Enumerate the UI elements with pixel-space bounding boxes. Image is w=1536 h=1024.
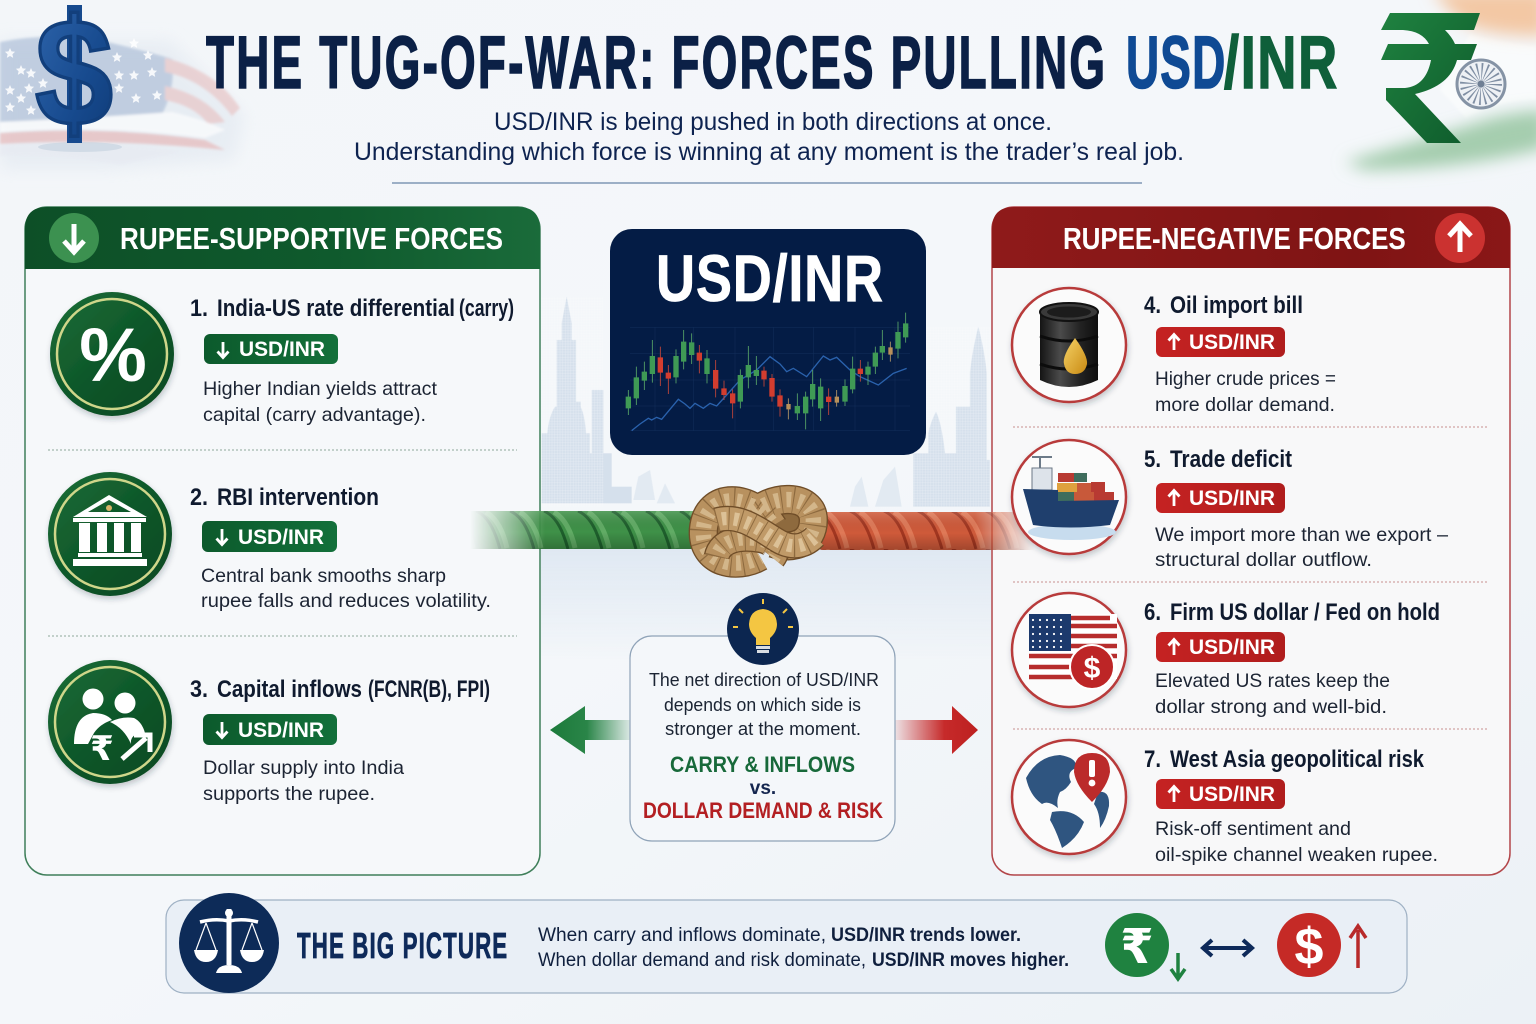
icon: globe with warning pin	[1012, 740, 1126, 854]
icon: dollar up: $	[1295, 918, 1324, 976]
icon: US flag with dollar coin	[1012, 593, 1126, 707]
force 1: rate differential: capital (carry advantage).	[203, 404, 426, 426]
icon: US flag with dollar coin: $	[1084, 652, 1101, 685]
force 1: rate differential: (carry)	[459, 295, 514, 322]
USD/INR chart card: USD/INR	[656, 241, 883, 315]
banner: the big picture	[166, 893, 1407, 993]
force 2: RBI intervention: Central bank smooths sharp	[201, 565, 446, 587]
force 4: oil import bill: more dollar demand.	[1155, 394, 1335, 416]
USD/INR chart card	[610, 229, 926, 455]
banner: the big picture: When dollar demand and risk dominate,	[538, 949, 866, 971]
icon: dollar up	[1277, 913, 1366, 977]
candlestick chart	[626, 313, 910, 431]
panel: rupee-supportive forces	[25, 207, 540, 875]
force 5: trade deficit: Trade deficit	[1170, 446, 1292, 473]
arrow: green left	[550, 706, 632, 754]
icon: percent: %	[79, 313, 147, 398]
force 4: oil import bill	[1012, 288, 1336, 416]
panel: rupee-negative forces	[992, 207, 1510, 875]
icon: rupee symbol	[1381, 13, 1480, 143]
skyline backdrop	[540, 297, 990, 507]
subtitle: USD/INR is being pushed in both directions at once.	[494, 108, 1052, 136]
force 1: rate differential: India-US rate differential	[217, 295, 455, 322]
badge: USD/INR up	[1156, 779, 1285, 809]
icon: balance scale	[179, 893, 279, 993]
force 3: capital inflows: Capital inflows	[217, 676, 362, 703]
force 5: trade deficit: We import more than we export –	[1155, 524, 1448, 546]
force 3: capital inflows: Dollar supply into India	[203, 757, 404, 779]
force 2: RBI intervention: rupee falls and reduces volatility.	[201, 590, 491, 612]
icon: rope knot	[690, 487, 825, 576]
callout: net direction: The net direction of USD/INR	[649, 669, 879, 690]
panel header: negative: RUPEE-NEGATIVE FORCES	[1063, 222, 1406, 257]
force 6: firm US dollar: 6.	[1144, 599, 1161, 626]
badge: USD/INR down	[202, 521, 337, 552]
icon: people and rupee	[48, 660, 172, 784]
badge: USD/INR up	[1156, 327, 1285, 357]
callout: net direction	[630, 636, 895, 841]
ship icon: trade deficit	[1012, 440, 1126, 554]
force 2: RBI intervention: 2.	[190, 484, 208, 511]
force 3: capital inflows: supports the rupee.	[203, 783, 375, 805]
icon: light bulb	[727, 593, 799, 665]
force 4: oil import bill: Higher crude prices =	[1155, 368, 1336, 390]
force 7: West Asia risk: oil-spike channel weaken rupee.	[1155, 844, 1438, 866]
banner: the big picture: THE BIG PICTURE	[297, 927, 507, 966]
icon: central bank	[48, 472, 172, 596]
callout: net direction: DOLLAR DEMAND & RISK	[643, 798, 883, 823]
badge: USD/INR down: USD/INR	[238, 719, 324, 742]
icon: rupee down: ₹	[1120, 919, 1154, 975]
badge: USD/INR down: USD/INR	[239, 338, 325, 361]
badge: USD/INR down	[203, 714, 337, 745]
icon: people and rupee: ₹	[90, 729, 114, 769]
callout: net direction: CARRY & INFLOWS	[670, 752, 855, 777]
banner: the big picture: When carry and inflows dominate,	[538, 924, 826, 946]
panel header: supportive	[25, 207, 540, 269]
force 7: West Asia risk: West Asia geopolitical risk	[1170, 746, 1425, 773]
rope: red side	[815, 512, 1045, 550]
badge: USD/INR up	[1156, 632, 1285, 662]
force 5: trade deficit	[1144, 446, 1448, 571]
icon: oil barrel	[1012, 288, 1126, 402]
title: /INR	[1224, 21, 1337, 104]
force 1: rate differential: Higher Indian yields attract	[203, 378, 438, 400]
callout: net direction: vs.	[750, 778, 776, 799]
arrow: red right	[894, 706, 978, 754]
force 7: West Asia risk: 7.	[1144, 746, 1161, 773]
force 5: trade deficit: 5.	[1144, 446, 1161, 473]
force 1: rate differential: 1.	[190, 295, 208, 322]
force 3: capital inflows	[48, 660, 490, 805]
force 2: RBI intervention: RBI intervention	[217, 484, 379, 511]
force 3: capital inflows: (FCNR(B), FPI)	[368, 676, 490, 703]
force 6: firm US dollar: dollar strong and well-bid.	[1155, 696, 1387, 718]
icon: percent	[50, 292, 174, 416]
callout: net direction: stronger at the moment.	[665, 718, 861, 739]
banner: the big picture: USD/INR moves higher.	[872, 949, 1069, 971]
icon: faded US flag backdrop	[0, 37, 245, 170]
badge: USD/INR up	[1156, 483, 1285, 513]
panel header: supportive: RUPEE-SUPPORTIVE FORCES	[120, 222, 503, 257]
callout: net direction: depends on which side is	[664, 694, 861, 715]
force 2: RBI intervention	[48, 472, 491, 612]
rope: green side	[473, 511, 693, 549]
badge: USD/INR up: USD/INR	[1189, 331, 1275, 354]
icon: rupee down	[1105, 913, 1185, 979]
badge: USD/INR up: USD/INR	[1189, 636, 1275, 659]
force 4: oil import bill: Oil import bill	[1170, 292, 1303, 319]
badge: USD/INR down: USD/INR	[238, 526, 324, 549]
banner: the big picture: USD/INR trends lower.	[831, 924, 1021, 946]
badge: USD/INR up: USD/INR	[1189, 783, 1275, 806]
water reflection	[541, 549, 991, 659]
title: THE TUG-OF-WAR: FORCES PULLING	[206, 22, 1105, 105]
panel header: negative	[992, 207, 1510, 268]
badge: USD/INR up: USD/INR	[1189, 487, 1275, 510]
force 6: firm US dollar: Elevated US rates keep the	[1155, 670, 1390, 692]
force 5: trade deficit: structural dollar outflow.	[1155, 549, 1372, 571]
force 7: West Asia risk	[1012, 740, 1438, 866]
icon: double arrow	[1203, 940, 1252, 956]
force 1: rate differential	[50, 292, 514, 426]
title: USD	[1126, 22, 1225, 105]
force 4: oil import bill: 4.	[1144, 292, 1161, 319]
force 6: firm US dollar	[1012, 593, 1440, 718]
force 7: West Asia risk: Risk-off sentiment and	[1155, 818, 1351, 840]
badge: USD/INR down	[204, 334, 338, 364]
force 6: firm US dollar: Firm US dollar / Fed on hold	[1170, 599, 1440, 626]
force 3: capital inflows: 3.	[190, 676, 208, 703]
icon: faded Indian flag backdrop	[1345, 0, 1536, 170]
subtitle	[354, 108, 1184, 166]
subtitle: Understanding which force is winning at any moment is the trader’s real job.	[354, 138, 1184, 166]
icon: Ashoka chakra	[1457, 60, 1505, 108]
